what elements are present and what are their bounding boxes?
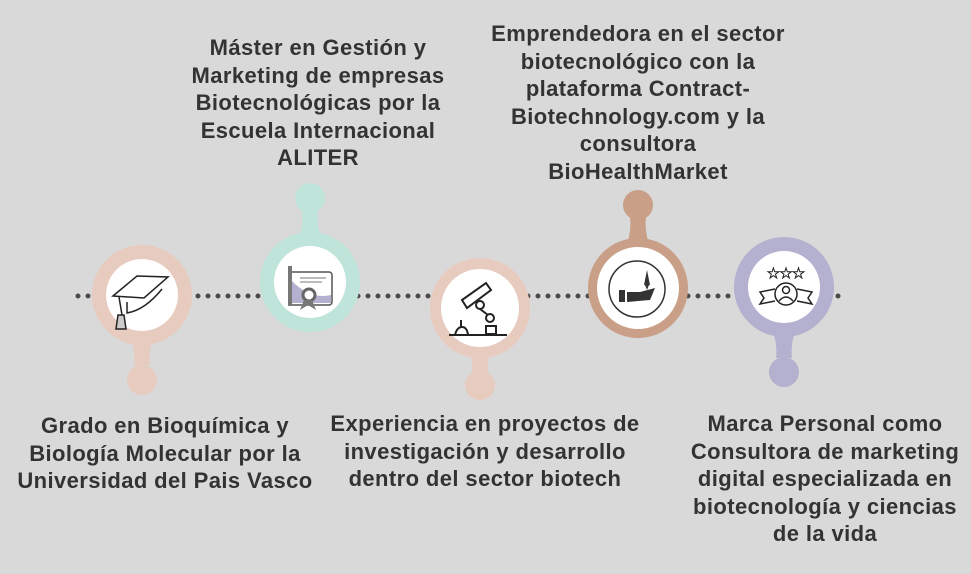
text: grado [17,413,313,493]
text: marca personal: biotecnología y ciencias [693,494,957,518]
text: marca personal [691,411,959,546]
text: experiencia: Experiencia en proyectos de [330,411,640,436]
text: emprendedora: plataforma Contract- [526,76,750,101]
text: master: Escuela Internacional [201,118,435,142]
node 4: hand with rocket [588,190,688,338]
text: master: ALITER [277,145,359,170]
text: emprendedora: Biotechnology.com y la [511,104,765,128]
text: emprendedora: Emprendedora en el sector [491,21,785,46]
text: master: Biotecnológicas por la [196,90,440,115]
text: grado: Universidad del Pais Vasco [17,468,313,493]
text: emprendedora: consultora [580,131,696,156]
node 3: microscope [430,258,530,400]
text: experiencia: investigación y desarrollo [344,438,626,464]
text: experiencia: dentro del sector biotech [349,466,621,491]
text: grado: Grado en Bioquímica y [41,413,289,438]
text: master: Máster en Gestión y [210,35,426,60]
text: marca personal: digital especializada en [698,466,952,491]
text: grado: Biología Molecular por la [29,440,301,466]
text: emprendedora: biotecnológico con la [521,48,755,74]
text: marca personal: Marca Personal como [707,411,943,436]
text: marca personal: de la vida [773,521,877,546]
text: master: Marketing de empresas [192,62,444,88]
text: marca personal: Consultora de marketing [691,438,959,464]
text: master [192,35,444,170]
text: emprendedora: BioHealthMarket [548,158,728,184]
text: emprendedora [491,21,785,184]
node 5: personal brand [734,237,834,387]
node 1: graduation cap [92,245,192,395]
text: experiencia [330,411,640,491]
node 2: diploma [260,183,360,332]
node 5: personal brand: ★★★ [767,265,805,281]
